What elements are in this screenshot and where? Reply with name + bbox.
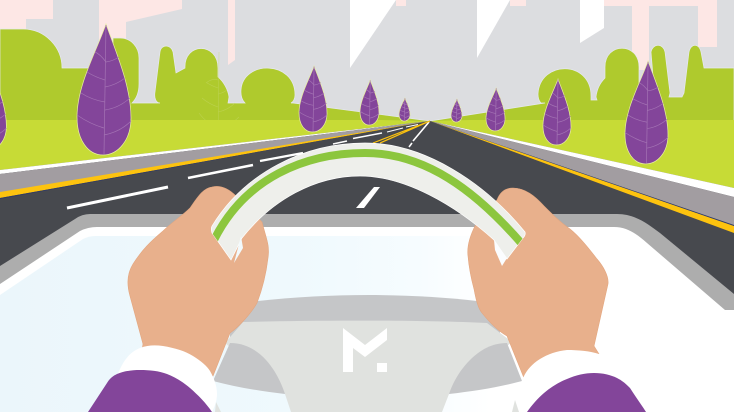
left shirt cuff bbox=[100, 345, 217, 412]
tree mid right bbox=[543, 79, 571, 145]
tree mid left bbox=[299, 66, 327, 132]
sky and distant city bbox=[0, 0, 734, 130]
tree large left bbox=[77, 24, 131, 155]
tree smallest right bbox=[451, 99, 462, 122]
steering wheel bbox=[211, 143, 525, 260]
gap between left thumb and wheel bbox=[234, 236, 243, 263]
gap between right thumb and wheel bbox=[494, 240, 507, 266]
wheel rim bbox=[211, 143, 525, 260]
steering column bbox=[225, 321, 512, 412]
faint ghost tree on the hillside bbox=[199, 52, 239, 143]
column slivers bbox=[215, 400, 519, 412]
row of purple trees bbox=[0, 24, 668, 164]
tree near horizon right bbox=[486, 88, 505, 131]
dashboard hood bbox=[230, 295, 500, 345]
right hand bbox=[468, 188, 608, 378]
centre double yellow lines bbox=[373, 121, 430, 143]
tree near horizon left bbox=[360, 80, 379, 125]
background bushes and far fields bbox=[0, 29, 734, 125]
green wheel stripe bbox=[214, 153, 522, 244]
right purple sleeve bbox=[527, 373, 646, 412]
lane dashes bbox=[67, 122, 429, 208]
tree far left bbox=[0, 68, 6, 149]
glass dashboard bbox=[0, 236, 490, 412]
logo bbox=[343, 328, 387, 372]
right column shadow bbox=[449, 343, 522, 394]
left column shadow bbox=[213, 343, 285, 394]
left hand bbox=[128, 186, 269, 376]
car interior bbox=[0, 214, 734, 412]
right shirt cuff bbox=[517, 350, 660, 412]
windshield frame bbox=[0, 214, 734, 412]
tree large right bbox=[625, 61, 668, 164]
tree smallest left bbox=[399, 98, 410, 121]
road bbox=[0, 121, 734, 310]
left purple sleeve bbox=[88, 370, 212, 412]
white frame lining bbox=[0, 227, 734, 412]
front lane dash bbox=[356, 187, 380, 208]
light green grass bbox=[0, 120, 734, 188]
